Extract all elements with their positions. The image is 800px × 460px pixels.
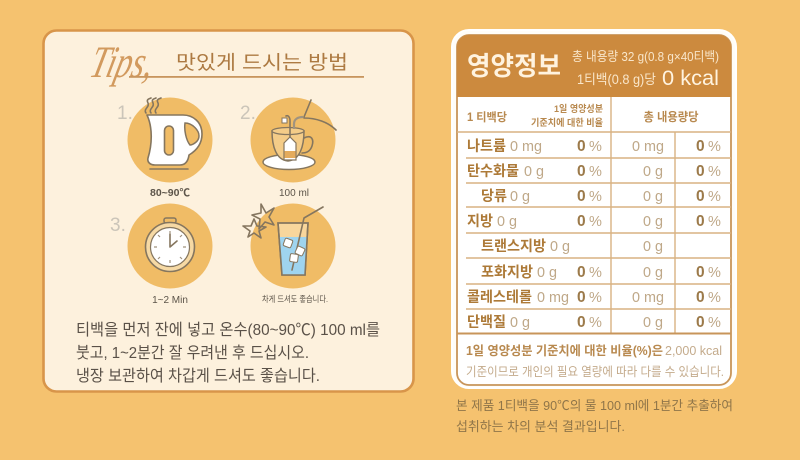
table footnote: 기준이므로 개인의 필요 열량에 따라 다를 수 있습니다. — [466, 365, 724, 379]
row: carbohydrate: 0 — [696, 163, 705, 180]
row: sugars: 0 — [696, 188, 705, 205]
row: fat: 0 g — [643, 213, 663, 230]
row: protein: 0 — [696, 314, 705, 331]
row: protein: 0 g — [510, 314, 530, 331]
row: carbohydrate: 탄수화물 — [467, 163, 519, 180]
row: carbohydrate: % — [708, 164, 721, 180]
nutrition header: 0 kcal — [662, 67, 719, 90]
row: sodium: 0 — [577, 138, 586, 155]
table column header — [467, 103, 698, 129]
row: sodium: 0 — [696, 138, 705, 155]
row: fat: 0 — [577, 213, 586, 230]
row: saturated fat: 포화지방 — [481, 264, 533, 281]
nutrition header: 1티백(0.8 g)당 — [577, 72, 656, 87]
row: saturated fat: 0 g — [537, 264, 557, 281]
table footnote — [466, 343, 724, 379]
heading: Tips script: Tips, — [86, 37, 160, 87]
instructions text — [76, 321, 380, 385]
row: trans fat — [481, 238, 663, 255]
row: sugars: 0 — [577, 188, 586, 205]
row: fat: % — [589, 214, 602, 230]
step 1: kettle: 80~90℃ — [150, 187, 190, 199]
nutrition header: 총 내용량 32 g(0.8 g×40티백) — [572, 49, 719, 64]
row: sugars: 당류 — [481, 188, 507, 205]
table footnote: 2,000 kcal — [665, 344, 722, 358]
instructions text: 냉장 보관하여 차갑게 드셔도 좋습니다. — [76, 367, 320, 385]
step 1: kettle: 1. — [117, 103, 133, 124]
row: sugars: 0 g — [643, 188, 663, 205]
row: protein: % — [708, 315, 721, 331]
row: saturated fat: 0 — [577, 264, 586, 281]
row: fat: 0 — [696, 213, 705, 230]
row: sugars — [481, 188, 721, 205]
row: saturated fat: 0 g — [643, 264, 663, 281]
row: sodium: % — [708, 139, 721, 155]
row: sodium: 0 mg — [632, 138, 664, 155]
row: trans fat: 0 g — [550, 238, 570, 255]
instructions text: 티백을 먼저 잔에 넣고 온수(80~90℃) 100 ml를 — [76, 321, 380, 339]
nutrition header — [457, 35, 731, 97]
row: saturated fat — [481, 264, 721, 281]
step 1: kettle — [117, 98, 212, 199]
row: cholesterol: 0 — [696, 289, 705, 306]
row: fat: 지방 — [467, 213, 493, 230]
row: carbohydrate: 0 — [577, 163, 586, 180]
heading: how to enjoy: 맛있게 드시는 방법 — [176, 52, 348, 74]
row: protein: 0 — [577, 314, 586, 331]
row: cholesterol — [467, 289, 721, 306]
instructions text: 붓고, 1~2분간 잘 우려낸 후 드십시오. — [76, 344, 309, 362]
row: saturated fat: 0 — [696, 264, 705, 281]
step 2: tea cup: 2. — [240, 103, 256, 124]
row: sugars: % — [708, 189, 721, 205]
row: cholesterol: 0 mg — [632, 289, 664, 306]
row: carbohydrate: 0 g — [524, 163, 544, 180]
table footnote: 1일 영양성분 기준치에 대한 비율(%)은 — [466, 343, 663, 358]
row: cholesterol: 0 — [577, 289, 586, 306]
step 3: stopwatch: 1~2 Min — [152, 295, 188, 306]
panel: tips — [44, 30, 414, 392]
row: carbohydrate: % — [589, 164, 602, 180]
row: fat: % — [708, 214, 721, 230]
step 4: iced drink: 차게 드셔도 좋습니다. — [262, 294, 328, 304]
row: cholesterol: 0 mg — [537, 289, 569, 306]
row: carbohydrate — [467, 163, 721, 180]
analysis note — [456, 398, 733, 434]
row: cholesterol: % — [589, 290, 602, 306]
row: saturated fat: % — [708, 265, 721, 281]
heading underline — [129, 76, 364, 78]
table grid lines — [457, 97, 731, 334]
analysis note: 섭취하는 차의 분석 결과입니다. — [456, 419, 625, 434]
row: trans fat: 트랜스지방 — [481, 238, 546, 255]
row: sodium: 0 mg — [510, 138, 542, 155]
row: cholesterol: 콜레스테롤 — [467, 289, 532, 306]
step 2: tea cup — [240, 98, 336, 199]
row: protein — [467, 314, 721, 331]
row: sodium: 나트륨 — [467, 138, 506, 155]
row: sugars: 0 g — [510, 188, 530, 205]
nutrition header: 영양정보 — [467, 51, 561, 81]
step 3: stopwatch: 3. — [110, 215, 126, 236]
step 2: tea cup: 100 ml — [279, 188, 309, 199]
row: sodium: % — [589, 139, 602, 155]
analysis note: 본 제품 1티백을 90℃의 물 100 ml에 1분간 추출하여 — [456, 398, 733, 413]
row: saturated fat: % — [589, 265, 602, 281]
table column header: 1일 영양성분 — [554, 103, 603, 115]
step 3: stopwatch — [110, 204, 212, 306]
row: cholesterol: % — [708, 290, 721, 306]
row: carbohydrate: 0 g — [643, 163, 663, 180]
table column header: 1 티백당 — [467, 111, 507, 124]
step 4: iced drink — [243, 204, 336, 304]
row: protein: 단백질 — [467, 314, 506, 331]
table column header: 기준치에 대한 비율 — [531, 117, 603, 129]
row: protein: % — [589, 315, 602, 331]
row: trans fat: 0 g — [643, 238, 663, 255]
row: sugars: % — [589, 189, 602, 205]
row: fat: 0 g — [497, 213, 517, 230]
row: sodium — [467, 138, 721, 155]
table column header: 총 내용량당 — [644, 110, 698, 124]
row: protein: 0 g — [643, 314, 663, 331]
row: fat — [467, 213, 721, 230]
panel: nutrition facts — [452, 30, 736, 388]
